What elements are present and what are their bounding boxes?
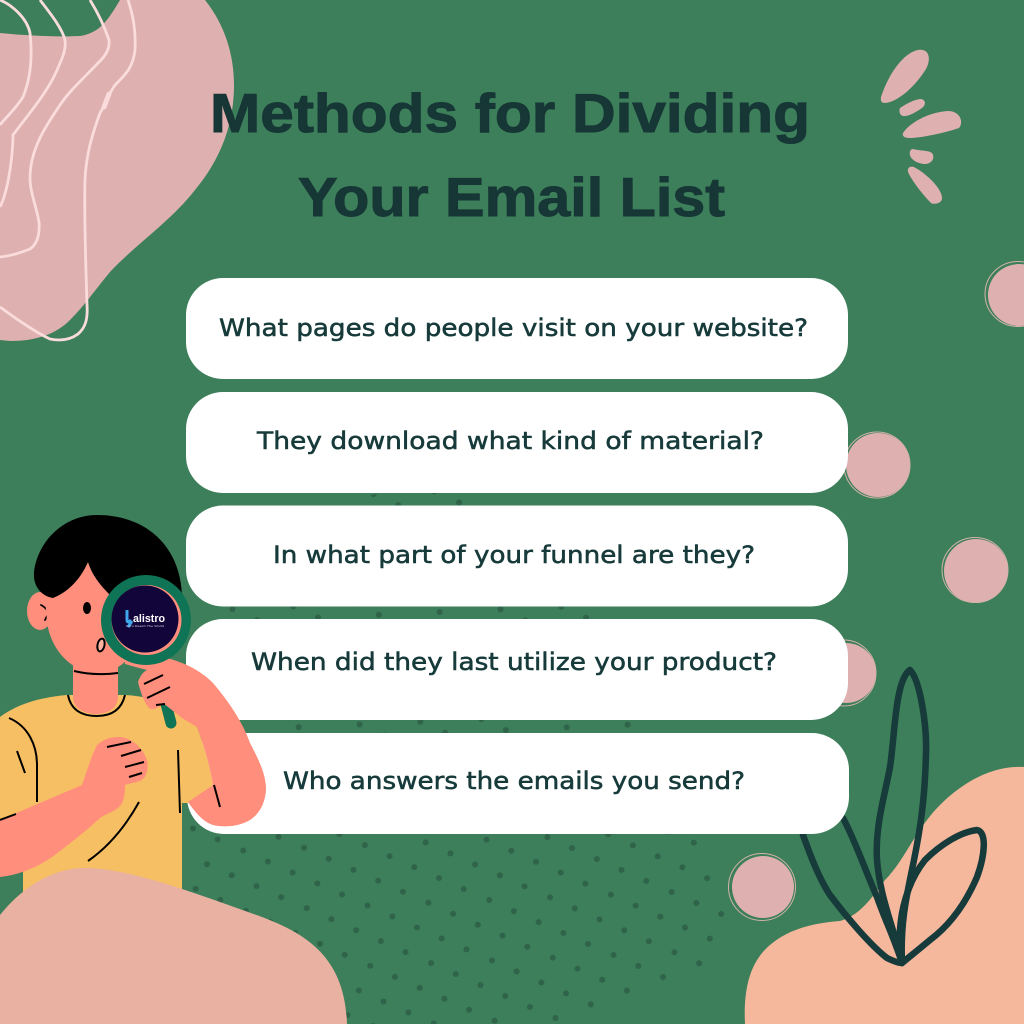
magnifier lens with logo: alistro <box>133 613 165 625</box>
bottom-left blush blob <box>0 868 347 1024</box>
body and finger lines <box>0 675 220 861</box>
face <box>45 562 135 673</box>
question box 5: Who answers the emails you send? <box>283 767 745 795</box>
question box 3 <box>186 506 848 606</box>
title: Methods for Dividing <box>210 82 810 144</box>
question box 4: When did they last utilize your product? <box>251 648 777 676</box>
title: Your Email List <box>298 166 725 228</box>
question box 5 <box>187 733 849 834</box>
mouth <box>96 638 106 652</box>
question box 2 <box>186 392 848 493</box>
top-right petal burst <box>881 50 961 204</box>
shirt <box>0 695 213 895</box>
raised arm and hand <box>125 657 266 826</box>
question box 3: In what part of your funnel are they? <box>273 541 755 569</box>
top-left pink blob with contour lines <box>0 0 234 341</box>
plant outline <box>803 670 984 963</box>
magnifier handle <box>165 700 171 723</box>
question box 2: They download what kind of material? <box>256 427 764 455</box>
magnifier lens with logo: Let's Reach The World <box>126 624 164 628</box>
question box 1 <box>186 278 848 379</box>
bottom-right peach blob <box>745 767 1024 1024</box>
front arm and hand <box>0 737 148 877</box>
title <box>210 82 810 228</box>
collar and neck lines <box>68 671 125 716</box>
question box 1: What pages do people visit on your website? <box>219 314 808 342</box>
decorative pink circles <box>728 262 1024 920</box>
question box 4 <box>186 619 848 720</box>
dotted pattern patch <box>190 490 736 1024</box>
figure: boy with magnifying glass <box>0 515 266 895</box>
magnifier lens with logo <box>101 575 191 665</box>
eye <box>83 602 91 614</box>
hair <box>34 515 182 598</box>
neck <box>73 665 118 714</box>
ear <box>27 592 53 630</box>
